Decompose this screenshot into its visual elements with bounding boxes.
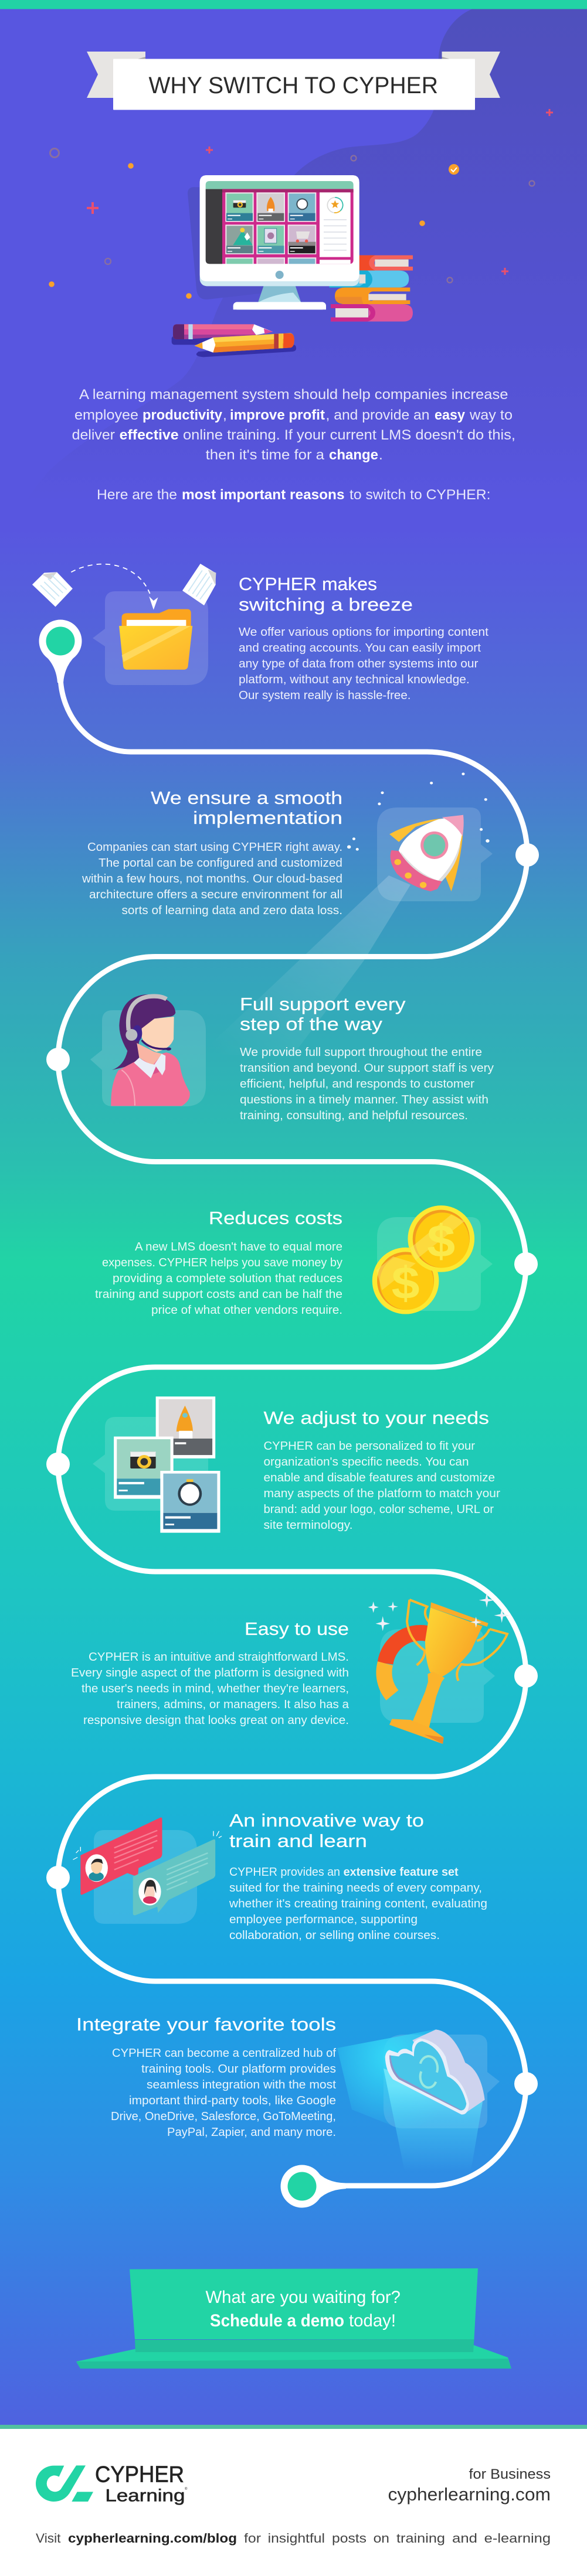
panel: step 5 needs: [114, 1396, 500, 1533]
heading: Integrate your favorite tools: [76, 2014, 336, 2035]
intro text: way to: [469, 407, 513, 423]
dashboard tiles: [226, 193, 315, 266]
body text: important third-party tools, like Google: [129, 2094, 336, 2107]
body text: expenses. CYPHER helps you save money by: [102, 1256, 342, 1269]
logo mark: [36, 2465, 93, 2502]
intro text: change: [329, 447, 378, 463]
body text: CYPHER can become a centralized hub of: [112, 2047, 336, 2060]
body text: architecture offers a secure environment for all: [89, 888, 342, 901]
start pin: [39, 620, 82, 683]
banner text: [205, 2288, 401, 2330]
blog line: training: [396, 2531, 445, 2546]
heading: Easy to use: [245, 1618, 349, 1639]
heading: Full support every: [240, 994, 406, 1014]
body text: The portal can be configured and customized: [99, 857, 342, 870]
body text: platform, without any technical knowledge.: [239, 673, 470, 686]
body text: many aspects of the platform to match your: [264, 1487, 500, 1500]
intro text: improve profit: [230, 407, 325, 423]
body text: extensive feature set: [344, 1866, 459, 1879]
intro text: ,: [223, 407, 227, 423]
blog line: and: [452, 2531, 477, 2546]
body text: [264, 1440, 500, 1532]
icon: rocket: [347, 772, 490, 891]
panel: step 2 implementation: [82, 772, 490, 917]
banner panel: [130, 2268, 478, 2339]
body text: [71, 1651, 350, 1727]
intro text: .: [379, 447, 383, 463]
heading: step of the way: [240, 1014, 383, 1034]
heading: CYPHER makes: [239, 574, 377, 594]
body text: [82, 841, 342, 917]
body text: site terminology.: [264, 1519, 353, 1532]
body text: organization's specific needs. You can: [264, 1456, 469, 1468]
icon: coins: $: [392, 1258, 420, 1309]
body text: providing a complete solution that reduces: [113, 1272, 342, 1285]
heading: An innovative way to: [229, 1810, 424, 1831]
intro text: online training. If your current LMS doesn't do this,: [183, 427, 515, 443]
books: [330, 255, 413, 322]
title banner: [87, 52, 500, 110]
intro text: to switch to CYPHER:: [350, 487, 490, 503]
decorative sparkles: [49, 109, 553, 299]
body text: [229, 1866, 487, 1942]
intro text: deliver: [72, 427, 115, 443]
blog line: insightful: [268, 2531, 325, 2546]
score panel: [320, 192, 351, 257]
body text: price of what other vendors require.: [151, 1304, 342, 1317]
heading: [229, 1810, 424, 1851]
heading: implementation: [193, 807, 342, 828]
intro text: employee: [74, 407, 138, 423]
illustration: monitor, books and pencils: [172, 175, 413, 357]
rocket exhaust beam: [199, 875, 410, 1055]
body text: collaboration, or selling online courses.: [229, 1929, 440, 1942]
body text: suited for the training needs of every company,: [229, 1882, 482, 1894]
body text: within a few hours, not months. Our cloud-based: [82, 873, 342, 885]
body text: PayPal, Zapier, and many more.: [167, 2126, 336, 2139]
body text: any type of data from other systems into our: [239, 657, 479, 670]
body text: questions in a timely manner. They assist with: [240, 1093, 488, 1106]
body text: brand: add your logo, color scheme, URL or: [264, 1503, 494, 1516]
intro text: easy: [435, 407, 465, 423]
winding path: [39, 620, 539, 2208]
icon: folder and documents: [32, 564, 216, 670]
body text: employee performance, supporting: [229, 1913, 418, 1926]
banner text: What are you waiting for?: [205, 2288, 401, 2307]
body text: the user's needs in mind, whether they're learners,: [82, 1682, 349, 1695]
end pin: [280, 2165, 346, 2208]
body text: seamless integration with the most: [147, 2078, 336, 2091]
icon: support agent: [111, 994, 190, 1106]
ribbon tails: [87, 52, 500, 98]
body text: [111, 2047, 336, 2139]
body text: [239, 626, 488, 702]
body text: training tools. Our platform provides: [141, 2063, 336, 2076]
body text: efficient, helpful, and responds to customer: [240, 1078, 474, 1091]
body text: training, consulting, and helpful resources.: [240, 1109, 468, 1122]
body text: We offer various options for importing content: [239, 626, 488, 639]
call to action banner: [76, 2268, 511, 2369]
body text: CYPHER is an intuitive and straightforward LMS.: [89, 1651, 349, 1664]
body text: enable and disable features and customize: [264, 1471, 495, 1484]
logo wordmark: CYPHER: [95, 2462, 184, 2487]
blog line: Visit: [36, 2531, 60, 2546]
footer: [0, 2425, 587, 2576]
icon: picture cards: [114, 1396, 220, 1533]
blog line: e-learning: [484, 2531, 551, 2546]
intro text: effective: [120, 427, 179, 443]
icon: chat bubbles: [73, 1818, 222, 1916]
tile pictograms: [233, 197, 315, 246]
blog line: [36, 2531, 551, 2546]
heading: We adjust to your needs: [264, 1408, 489, 1428]
body text: responsive design that looks great on any device.: [83, 1714, 349, 1727]
website: cypherlearning.com: [388, 2484, 551, 2505]
heading: train and learn: [229, 1831, 367, 1851]
monitor: [200, 175, 359, 309]
body text: [240, 1046, 494, 1122]
heading: [240, 994, 406, 1034]
panel: step 4 costs: [95, 1205, 474, 1317]
body text: [95, 1241, 342, 1317]
body text: trainers, admins, or managers. It also has a: [117, 1698, 350, 1711]
panel: step 7 train: [73, 1810, 487, 1942]
intro text: [72, 387, 515, 503]
body text: We provide full support throughout the entire: [240, 1046, 482, 1059]
body text: transition and beyond. Our support staff is very: [240, 1062, 494, 1075]
intro text: productivity: [142, 407, 222, 423]
body text: whether it's creating training content, evaluating: [229, 1897, 487, 1910]
blog line: cypherlearning.com/blog: [68, 2531, 237, 2546]
body text: and creating accounts. You can easily import: [239, 642, 481, 655]
icon: coins: $: [427, 1216, 455, 1266]
logo wordmark: ®: [185, 2487, 188, 2491]
body text: Our system really is hassle-free.: [239, 689, 410, 702]
body text: training and support costs and can be half the: [95, 1288, 342, 1301]
blog line: on: [374, 2531, 389, 2546]
banner panel: [113, 59, 475, 110]
body text: CYPHER provides an: [229, 1866, 340, 1879]
top bar: [0, 0, 587, 9]
banner text: Schedule a demo: [210, 2311, 344, 2330]
website: for Business: [469, 2466, 551, 2482]
blog line: for: [244, 2531, 261, 2546]
intro text: A learning management system should help companies increase: [79, 387, 508, 403]
pink pencil: [172, 324, 273, 345]
website: [388, 2466, 551, 2505]
panel: step 3 support: [111, 994, 494, 1122]
heading: We ensure a smooth: [151, 788, 342, 808]
banner text: today!: [349, 2311, 396, 2330]
icon: trophy: [368, 1593, 510, 1744]
yellow pencil: [195, 333, 296, 357]
intro text: Here are the: [97, 487, 177, 503]
heading: [239, 574, 413, 615]
panel: step 8 integrate: [76, 2014, 485, 2171]
panel: step 6 easy: [71, 1593, 510, 1744]
heading: [151, 788, 342, 828]
background blob: [18, 9, 587, 516]
icon backdrop tiles: [90, 591, 500, 2128]
heading: switching a breeze: [239, 594, 413, 615]
intro text: , and provide an: [326, 407, 429, 423]
logo wordmark: [95, 2462, 188, 2506]
blog line: posts: [332, 2531, 367, 2546]
logo: [36, 2462, 188, 2506]
icon: coins: [372, 1205, 474, 1314]
body text: CYPHER can be personalized to fit your: [264, 1440, 475, 1453]
body text: sorts of learning data and zero data loss.: [122, 904, 342, 917]
intro text: most important reasons: [182, 487, 345, 503]
title: WHY SWITCH TO CYPHER: [149, 73, 438, 98]
heading: Reduces costs: [209, 1208, 342, 1228]
icon: cloud: [337, 2029, 485, 2171]
intro text: then it's time for a: [206, 447, 324, 463]
logo wordmark: Learning: [105, 2486, 185, 2506]
body text: Companies can start using CYPHER right away.: [87, 841, 342, 854]
panel: step 1 switching: [32, 564, 488, 702]
monitor backdrop: [188, 187, 281, 299]
path nodes: [46, 843, 539, 2095]
banner base: [76, 2345, 511, 2369]
body text: Drive, OneDrive, Salesforce, GoToMeeting,: [111, 2110, 336, 2123]
body text: A new LMS doesn't have to equal more: [135, 1241, 342, 1253]
body text: Every single aspect of the platform is designed with: [71, 1667, 349, 1679]
